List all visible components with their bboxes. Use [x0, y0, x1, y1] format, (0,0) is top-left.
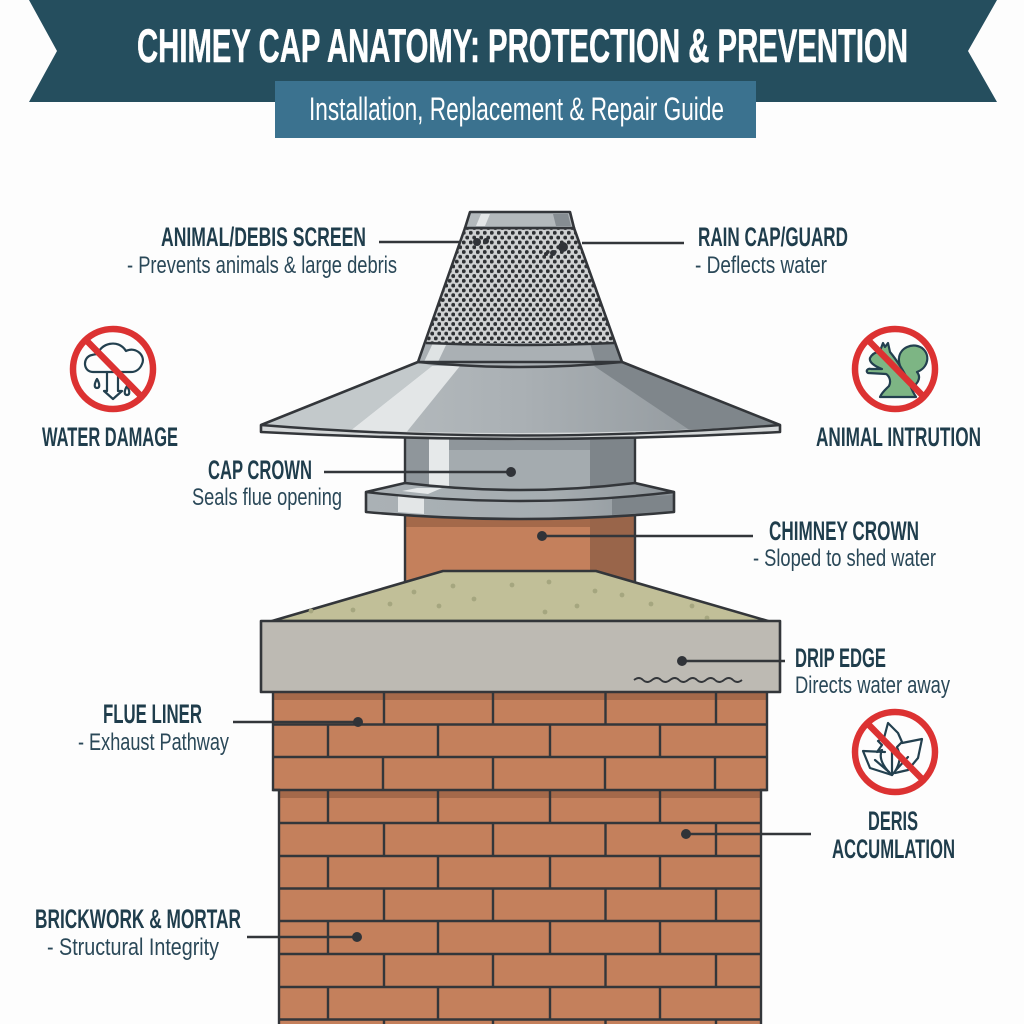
shade brim: [261, 362, 780, 441]
subtitle box: Installation, Replacement & Repair Guide: [309, 91, 724, 127]
callout: flue liner: FLUE LINER: [103, 699, 202, 729]
callout: animal/debris screen: ANIMAL/DEBIS SCREEN: [161, 222, 366, 252]
callout: rain cap: - Deflects water: [695, 252, 827, 279]
chimney brick stack: [273, 692, 767, 1024]
callout: animal/debris screen: [127, 222, 460, 279]
callout: chimney crown: CHIMNEY CROWN: [769, 516, 919, 546]
callout: flue liner: [78, 699, 363, 756]
callout: drip edge: [677, 643, 950, 699]
label: water damage: WATER DAMAGE: [42, 422, 178, 452]
callout: flue liner: - Exhaust Pathway: [78, 729, 229, 756]
drip edge slab: [261, 621, 780, 692]
chimney crown: [272, 571, 768, 621]
callout: brickwork and mortar: [35, 904, 362, 961]
callout: drip edge: Directs water away: [795, 672, 950, 699]
icon: debris accumulation: [855, 712, 935, 792]
cap flange: [366, 483, 674, 519]
callout: animal/debris screen: - Prevents animals & large debris: [127, 252, 397, 279]
callout: chimney crown: [537, 516, 936, 572]
callout: brickwork and mortar: BRICKWORK & MORTAR: [35, 904, 241, 934]
cap drum: [405, 438, 635, 492]
callout: rain cap: [582, 222, 848, 279]
icon: water damage: [73, 329, 153, 409]
callout: debris accumulation: [681, 806, 955, 864]
callout: cap crown: [192, 455, 516, 511]
upper flue brick section: [405, 514, 635, 589]
callout: drip edge: DRIP EDGE: [795, 643, 886, 673]
callout: cap crown: Seals flue opening: [192, 484, 342, 511]
callout: chimney crown: - Sloped to shed water: [753, 545, 936, 572]
rain cap top band: [465, 212, 574, 228]
animal and debris mesh screen: [418, 228, 622, 367]
callout: debris accumulation: DERIS: [868, 806, 918, 836]
callout: cap crown: CAP CROWN: [208, 455, 312, 485]
title banner: [29, 0, 997, 102]
callout: rain cap: RAIN CAP/GUARD: [698, 222, 848, 252]
icon: animal intrusion: [855, 329, 935, 409]
subtitle box: [275, 81, 756, 138]
callout: brickwork and mortar: - Structural Integrity: [47, 934, 219, 961]
